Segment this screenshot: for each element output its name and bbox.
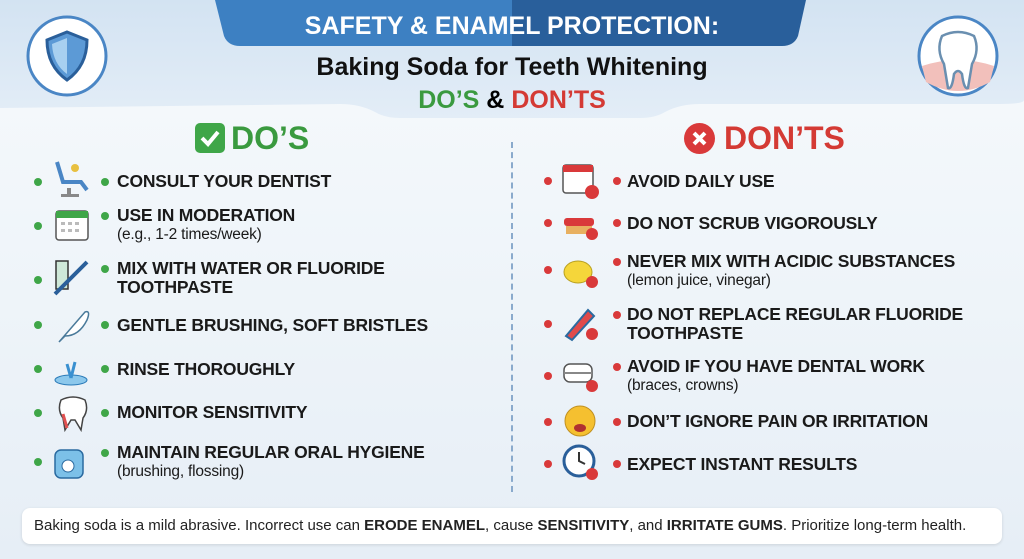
dont: scrub: DO NOT SCRUB VIGOROUSLY bbox=[627, 213, 877, 233]
dont: acidic bbox=[627, 251, 955, 289]
do: moderation bbox=[117, 205, 295, 243]
dont: acidic: NEVER MIX WITH ACIDIC SUBSTANCES bbox=[627, 251, 955, 271]
icon: dental chair bbox=[55, 161, 88, 197]
title: SAFETY & ENAMEL PROTECTION: bbox=[305, 12, 719, 40]
do: maintain: (brushing, flossing) bbox=[117, 463, 244, 480]
heading: dos bbox=[195, 120, 309, 156]
dont: replace: DO NOT REPLACE REGULAR FLUORIDE bbox=[627, 304, 963, 324]
do: mix: MIX WITH WATER OR FLUORIDE bbox=[117, 258, 385, 278]
footer note: Baking soda is a mild abrasive. Incorrect use can ERODE ENAMEL, cause SENSITIVITY, and IRRITATE GUMS. Prioritize long-term health. bbox=[34, 517, 966, 534]
icon: calendar x bbox=[562, 164, 599, 199]
dont: acidic: (lemon juice, vinegar) bbox=[627, 272, 771, 289]
icon: feather bbox=[58, 310, 90, 342]
icon: water splash bbox=[54, 362, 88, 386]
text: DO’S bbox=[231, 120, 309, 156]
icon: tooth bbox=[918, 16, 998, 96]
text: DON’TS bbox=[724, 120, 845, 156]
header background bbox=[0, 0, 1024, 118]
icon: toothpaste tube bbox=[564, 308, 598, 342]
dont: replace: TOOTHPASTE bbox=[627, 323, 743, 343]
banner bbox=[215, 0, 806, 46]
do: gentle: GENTLE BRUSHING, SOFT BRISTLES bbox=[117, 315, 428, 335]
heading: donts bbox=[684, 120, 845, 156]
icon: braces bbox=[563, 363, 598, 392]
icon: scrub brush bbox=[564, 218, 598, 240]
icon: shield bbox=[26, 16, 108, 96]
DONT items bbox=[544, 177, 552, 185]
do: maintain: MAINTAIN REGULAR ORAL HYGIENE bbox=[117, 442, 425, 462]
dont: dental work: AVOID IF YOU HAVE DENTAL WORK bbox=[627, 356, 925, 376]
do: moderation: (e.g., 1-2 times/week) bbox=[117, 226, 262, 243]
do: moderation: USE IN MODERATION bbox=[117, 205, 295, 225]
divider bbox=[511, 142, 513, 492]
do: rinse: RINSE THOROUGHLY bbox=[117, 359, 295, 379]
icon: clock bbox=[562, 444, 598, 480]
dont: pain: DON’T IGNORE PAIN OR IRRITATION bbox=[627, 411, 928, 431]
do: monitor: MONITOR SENSITIVITY bbox=[117, 402, 307, 422]
icon: toothpaste bbox=[54, 260, 88, 296]
do: mix: TOOTHPASTE bbox=[117, 277, 233, 297]
footer note bbox=[22, 508, 1002, 544]
dont: replace bbox=[627, 304, 963, 343]
icon: pain face bbox=[564, 406, 596, 436]
subtitle: Baking Soda for Teeth Whitening bbox=[316, 53, 708, 81]
do: mix bbox=[117, 258, 385, 297]
do: consult: CONSULT YOUR DENTIST bbox=[117, 171, 331, 191]
subtitle dos donts: DO’S & DON’TS bbox=[418, 86, 606, 114]
icon: calendar bbox=[55, 210, 89, 241]
do: maintain bbox=[117, 442, 425, 480]
dont: instant: EXPECT INSTANT RESULTS bbox=[627, 454, 857, 474]
dont: daily: AVOID DAILY USE bbox=[627, 171, 774, 191]
icon: floss bbox=[54, 449, 84, 479]
dont: dental work bbox=[627, 356, 925, 394]
DO items bbox=[34, 178, 42, 186]
icon: sensitive tooth bbox=[58, 396, 88, 432]
dont: dental work: (braces, crowns) bbox=[627, 377, 738, 394]
icon: lemon bbox=[564, 260, 598, 288]
